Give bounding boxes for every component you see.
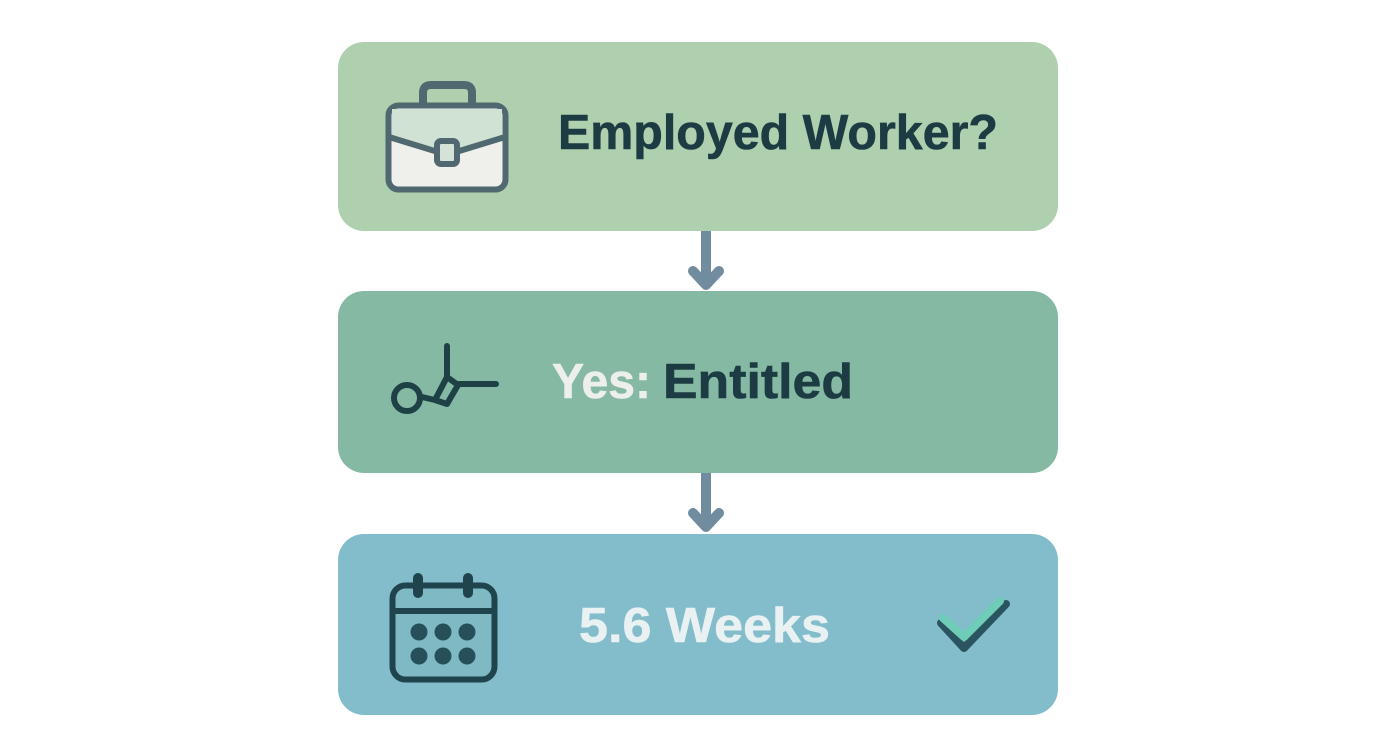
- arrow: step 1 to step 2: [693, 230, 719, 285]
- panel background: [338, 534, 1058, 715]
- heading: employed worker: Employed Worker?: [558, 106, 998, 160]
- panel background: [338, 42, 1058, 231]
- panel: employed worker: [338, 42, 1058, 231]
- icon: calendar: [392, 578, 494, 680]
- heading: yes entitled: Entitled: [663, 355, 853, 409]
- arrow: step 2 to step 3: [693, 472, 719, 527]
- panel: weeks: [338, 534, 1058, 715]
- icon: abstract lever: [394, 346, 496, 411]
- panel background: [338, 291, 1058, 473]
- icon: check mark: [941, 601, 1006, 648]
- heading: 5.6 weeks: 5.6 Weeks: [579, 599, 830, 653]
- icon: briefcase: [388, 85, 506, 190]
- panel: entitled: [338, 291, 1058, 473]
- heading: yes entitled: Yes:: [552, 355, 651, 409]
